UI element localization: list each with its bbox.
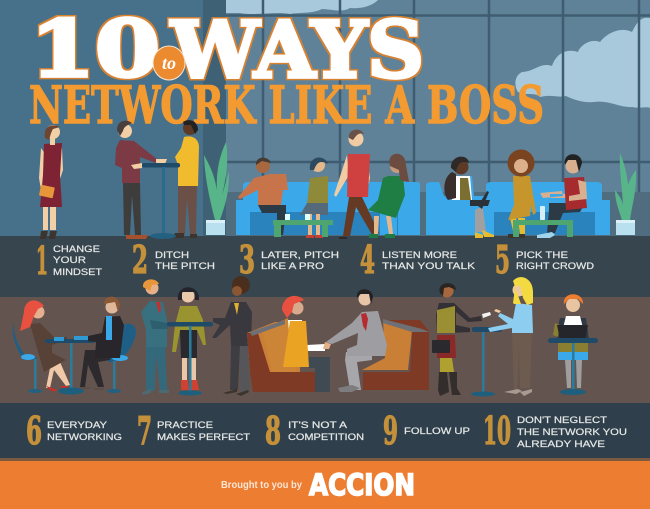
tip 1: MINDSET	[53, 267, 103, 277]
tip 8	[265, 408, 364, 453]
tip 3: LATER, PITCH	[261, 250, 339, 260]
tip 5	[495, 237, 595, 282]
icon: potted plant left	[204, 142, 229, 235]
tip 10: 10	[483, 408, 511, 453]
table: standing table	[471, 327, 502, 396]
table: standing table	[167, 322, 213, 396]
tip 5: RIGHT CROWD	[516, 261, 595, 271]
table: green coffee table right	[513, 206, 573, 237]
figure: man in grey suit	[323, 289, 387, 392]
tip 4: THAN YOU TALK	[382, 261, 475, 271]
tip 2: DITCH	[155, 250, 189, 260]
footer band	[0, 461, 650, 509]
figure: woman with black bob	[172, 287, 206, 390]
tip 10: DON'T NEGLECT	[517, 415, 608, 425]
table: standing table	[142, 163, 180, 239]
tip 8: COMPETITION	[288, 432, 364, 442]
table: cafe table	[45, 336, 95, 394]
figure: seated person in orange vest	[282, 296, 330, 392]
tip 4: 4	[360, 237, 375, 282]
title: 10: 10	[30, 4, 160, 95]
sofa: left blue sofa	[236, 182, 420, 235]
tip 2: THE PITCH	[155, 261, 215, 271]
figure: woman with afro	[508, 150, 536, 238]
figure: man in teal suit	[141, 279, 169, 395]
chair: right	[107, 324, 136, 393]
tip 7	[137, 408, 251, 453]
tip 6	[26, 408, 122, 453]
band: lower tips	[0, 403, 650, 458]
tip 1: YOUR	[53, 255, 87, 265]
tip 9: FOLLOW UP	[404, 426, 470, 436]
tip 10	[483, 408, 627, 453]
icon: potted plant right	[615, 153, 636, 235]
cloud: top	[226, 0, 378, 14]
figure: person at laptop with orange hair	[548, 294, 598, 395]
footer credit	[221, 468, 415, 502]
tip 6: 6	[26, 408, 42, 453]
tip 8: 8	[265, 408, 281, 453]
figure: woman with laptop	[444, 157, 494, 238]
tip 2	[132, 237, 215, 282]
figure: person in yellow top	[172, 120, 199, 238]
logo: accion: ACCION	[309, 468, 415, 502]
tip 2: 2	[132, 237, 148, 282]
sofa: right blue sofa	[426, 182, 610, 235]
tip 7: MAKES PERFECT	[157, 432, 251, 442]
figure: man in red sweater	[537, 154, 587, 238]
tip 4: LISTEN MORE	[382, 250, 457, 260]
tip 6: NETWORKING	[47, 432, 122, 442]
band: upper floor	[0, 236, 650, 297]
tip 1	[36, 238, 103, 283]
tip 7: 7	[137, 408, 152, 453]
title: ways: WAYS	[170, 5, 424, 96]
badge: to: to	[162, 53, 176, 73]
figure: red-haired woman on chair	[13, 300, 70, 393]
window panel	[203, 0, 650, 237]
tip 6: EVERYDAY	[47, 420, 107, 430]
tip 3: 3	[239, 237, 255, 282]
tip 4	[360, 237, 475, 282]
background wall	[0, 0, 650, 237]
tip 8: IT'S NOT A	[288, 420, 347, 430]
tip 10: ALREADY HAVE	[517, 439, 605, 449]
title	[29, 4, 544, 136]
table: green coffee table left	[273, 214, 333, 237]
figure: blonde woman	[488, 277, 533, 396]
cloud: right	[515, 18, 650, 108]
figure: standing man in red shirt	[334, 130, 379, 239]
footer: brought to you by: Brought to you by	[221, 479, 302, 491]
figure: man in black jacket on chair	[80, 297, 136, 393]
tip 3	[239, 237, 339, 282]
figure: seated woman in olive	[300, 157, 328, 238]
tip 7: PRACTICE	[157, 420, 213, 430]
tip 5: PICK THE	[516, 250, 568, 260]
tip 5: 5	[495, 237, 510, 282]
figure: man in dark jacket	[212, 276, 252, 396]
band: lower lounge wall	[0, 297, 650, 403]
figure: woman with olive vest and black bag	[432, 283, 491, 396]
divider band	[0, 458, 650, 461]
figure: seated man in orange shirt	[238, 158, 288, 235]
sofa: brown lounge sofa	[247, 318, 429, 392]
figure: man in maroon shirt	[115, 121, 167, 239]
tip 9: 9	[383, 408, 398, 453]
tip 1: CHANGE	[53, 244, 100, 254]
figure: woman in green dress	[368, 154, 409, 238]
figure: woman in red dress	[39, 125, 63, 239]
badge: to	[153, 46, 185, 80]
tip 1: 1	[36, 238, 48, 283]
tip 10: THE NETWORK YOU	[517, 427, 627, 437]
tip 3: LIKE A PRO	[261, 261, 324, 271]
chair: left	[13, 322, 42, 393]
tip 9	[383, 408, 470, 453]
